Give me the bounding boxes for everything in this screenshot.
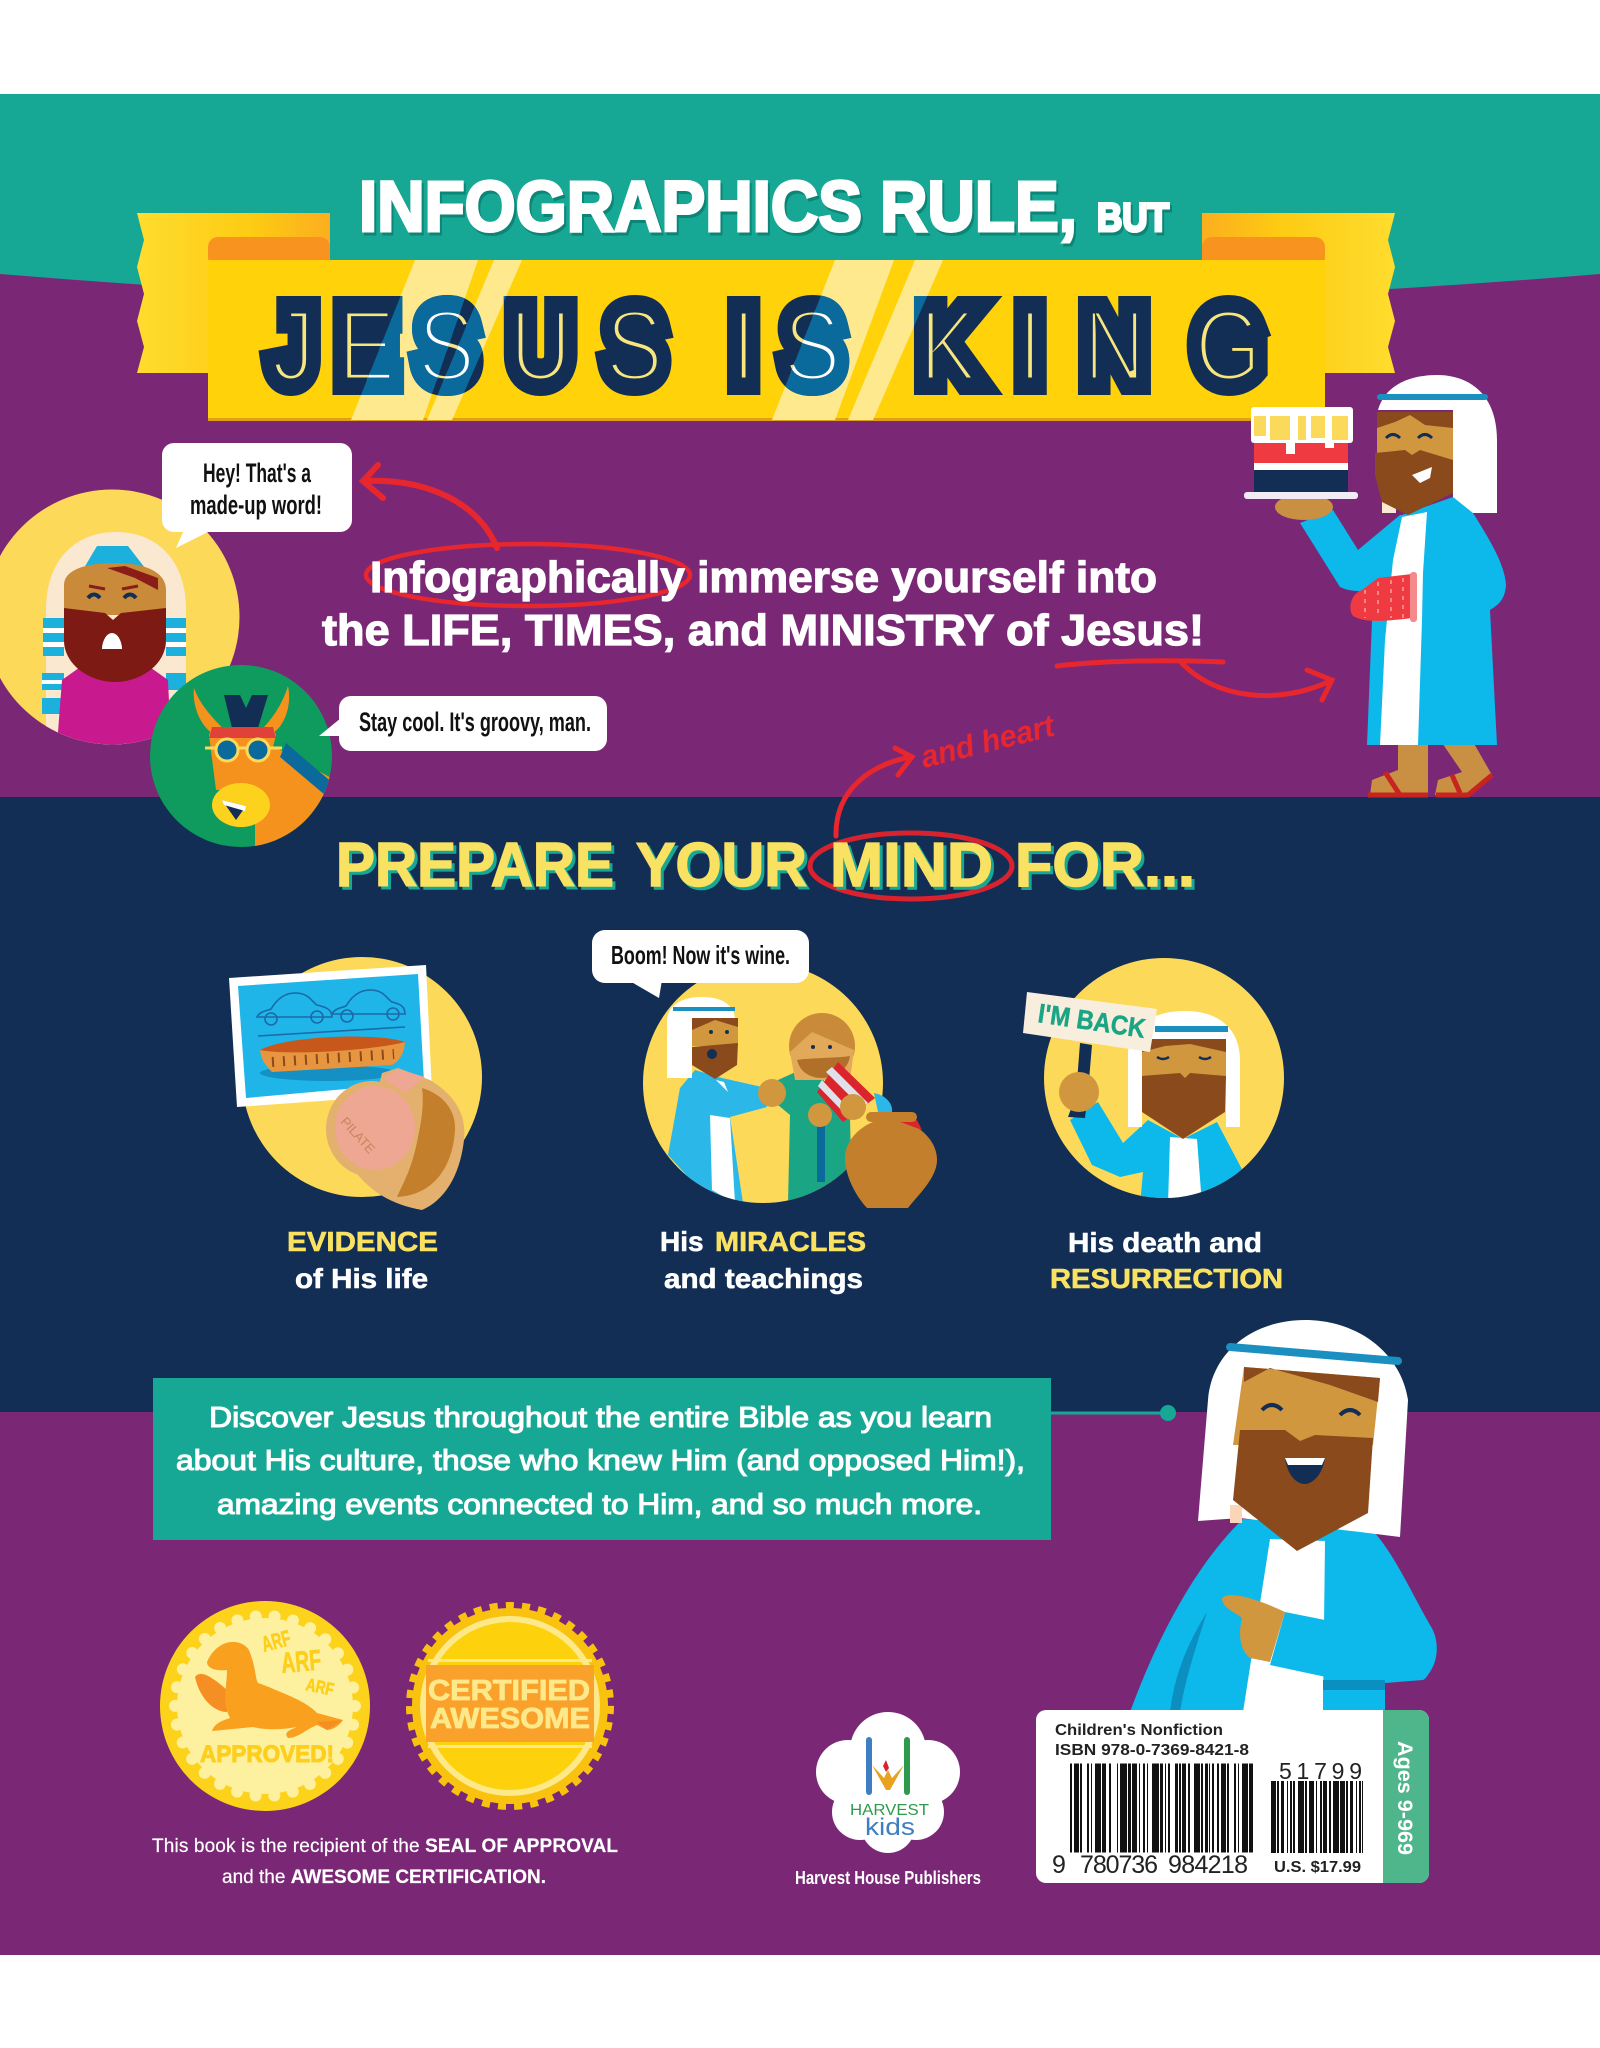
sign [1023, 992, 1157, 1118]
pointing hand [1222, 1595, 1285, 1662]
caption: evidence: of His life [295, 1263, 428, 1294]
caption: miracles: His [660, 1226, 704, 1257]
caption: resurrection [1050, 1227, 1283, 1294]
seal caption: and the AWESOME CERTIFICATION. [222, 1867, 546, 1888]
red annotation: and heart [810, 708, 1059, 899]
barcode panel: 984218 [1168, 1851, 1248, 1879]
legs and sandals [1368, 740, 1492, 795]
red annotation: circled word with arrow [363, 465, 690, 606]
title highlight through stripes: JESUS [272, 289, 663, 402]
heading: prepare your mind for: PREPARE [336, 831, 614, 900]
badge: approved seal: ARF [280, 1645, 322, 1680]
heading: prepare your mind for: FOR... [1015, 831, 1195, 900]
panel: teal description [153, 1378, 1051, 1540]
intro paragraph: the LIFE, TIMES, and MINISTRY of Jesus! [322, 606, 1204, 655]
title: jesus is king: JESUS [272, 289, 663, 402]
face [1233, 1367, 1380, 1445]
title highlight through stripes [361, 295, 928, 396]
publisher logo: HARVEST [850, 1802, 929, 1819]
panel: teal description: Discover Jesus throughout the entire Bible as you learn [209, 1402, 992, 1434]
publisher logo: kids [865, 1814, 915, 1841]
caption: resurrection: His death and [1068, 1227, 1262, 1258]
scarf [1198, 1320, 1408, 1537]
head scarf [1378, 375, 1497, 513]
banner ribbon [137, 213, 1395, 421]
heading: prepare your mind for [336, 831, 1195, 900]
panel: teal description: amazing events connected to Him, and so much more. [217, 1489, 982, 1521]
character: large pointing jesus [1130, 1320, 1437, 1712]
barcode panel: 9 [1052, 1851, 1066, 1879]
title: jesus is king: IS [732, 289, 840, 402]
heading line: infographics rule, but: INFOGRAPHICS RULE, [359, 168, 1077, 247]
seal caption [152, 1836, 618, 1888]
character: bearded man in yellow circle [0, 490, 240, 745]
face and beard [1375, 397, 1485, 515]
badge: approved seal: APPROVED! [200, 1741, 334, 1768]
caption: miracles: MIRACLES [715, 1226, 866, 1257]
title highlight through stripes: JESUS [272, 289, 663, 402]
title highlight through stripes: KING [920, 289, 1261, 402]
speech bubble: made-up word [162, 443, 352, 548]
seal caption: This book is the recipient of the SEAL OF APPROVAL [152, 1836, 618, 1857]
intro paragraph [322, 553, 1204, 655]
publisher logo: Harvest House Publishers [795, 1868, 981, 1888]
heading: prepare your mind for: YOUR [636, 831, 807, 900]
caption: miracles [660, 1226, 866, 1294]
title: jesus is king: IS [732, 289, 840, 402]
sign: I'M BACK [1036, 998, 1148, 1044]
character: jesus with cake [1244, 375, 1506, 795]
badge: approved seal: ARF [259, 1625, 293, 1657]
publisher logo [795, 1712, 981, 1888]
red annotation: and heart: and heart [917, 708, 1059, 775]
badge: approved seal: ARF [304, 1674, 336, 1700]
robe [1300, 497, 1506, 745]
head and scarf [1128, 1011, 1240, 1139]
badge: approved seal [160, 1601, 370, 1811]
character: donkey with sunglasses [150, 665, 335, 847]
headband [1230, 1347, 1398, 1361]
caption: resurrection: RESURRECTION [1050, 1263, 1283, 1294]
barcode panel: Children's Nonfiction [1055, 1722, 1223, 1739]
title: jesus is king: KING [920, 289, 1261, 402]
title: jesus is king [272, 289, 1261, 402]
title highlight through stripes: IS [732, 289, 840, 402]
ring [326, 1068, 464, 1210]
speech bubble: wine [592, 930, 809, 998]
main bars [1070, 1764, 1255, 1852]
price bars [1271, 1781, 1363, 1853]
speech bubble: groovy: Stay cool. It's groovy, man. [359, 707, 591, 737]
ring: PILATE [338, 1114, 378, 1157]
panel: teal description: about His culture, those who knew Him (and opposed Him!), [176, 1445, 1025, 1477]
speech bubble: made-up word: Hey! That's a [203, 458, 312, 488]
badge: certified awesome seal: AWESOME [430, 1703, 590, 1735]
caption: evidence [287, 1226, 438, 1294]
heading: prepare your mind for: MIND [830, 831, 993, 900]
speech bubble: made-up word: made-up word! [190, 490, 322, 520]
icon group: resurrection [1023, 958, 1284, 1205]
title: jesus is king: KING [920, 289, 1261, 402]
caption: evidence: EVIDENCE [287, 1226, 438, 1257]
sleeve [1270, 1600, 1436, 1680]
barcode panel: U.S. $17.99 [1274, 1859, 1361, 1876]
badge: certified awesome seal [410, 1606, 610, 1806]
barcode panel: 780736 [1080, 1851, 1158, 1879]
icon group: miracles [643, 963, 937, 1208]
jesus figure [667, 997, 786, 1107]
barcode panel: ISBN 978-0-7369-8421-8 [1055, 1742, 1249, 1759]
cake [1244, 407, 1358, 520]
title highlight through stripes: KING [920, 289, 1261, 402]
heading line: infographics rule, but: BUT [1097, 196, 1169, 240]
robe [1130, 1519, 1437, 1712]
speech bubble: wine: Boom! Now it's wine. [611, 940, 790, 970]
barcode panel [1036, 1710, 1429, 1883]
title highlight through stripes: IS [732, 289, 840, 402]
disciple figure [789, 1013, 892, 1127]
water jar [845, 1112, 937, 1208]
red annotation: underline with arrow [1057, 661, 1332, 700]
connector line and dot [1051, 1405, 1176, 1421]
title: jesus is king: JESUS [272, 289, 663, 402]
barcode panel: Ages 9-969 [1393, 1741, 1416, 1855]
sea lion [195, 1642, 343, 1738]
badge: certified awesome seal: CERTIFIED [428, 1675, 590, 1707]
caption: miracles: and teachings [664, 1263, 863, 1294]
barcode panel: 51799 [1279, 1758, 1362, 1784]
icon group: evidence [229, 957, 482, 1210]
intro paragraph: Infographically immerse yourself into [370, 553, 1157, 602]
oven mitt [1350, 572, 1417, 622]
photo of boat [229, 965, 432, 1107]
speech bubble: groovy [319, 696, 607, 751]
